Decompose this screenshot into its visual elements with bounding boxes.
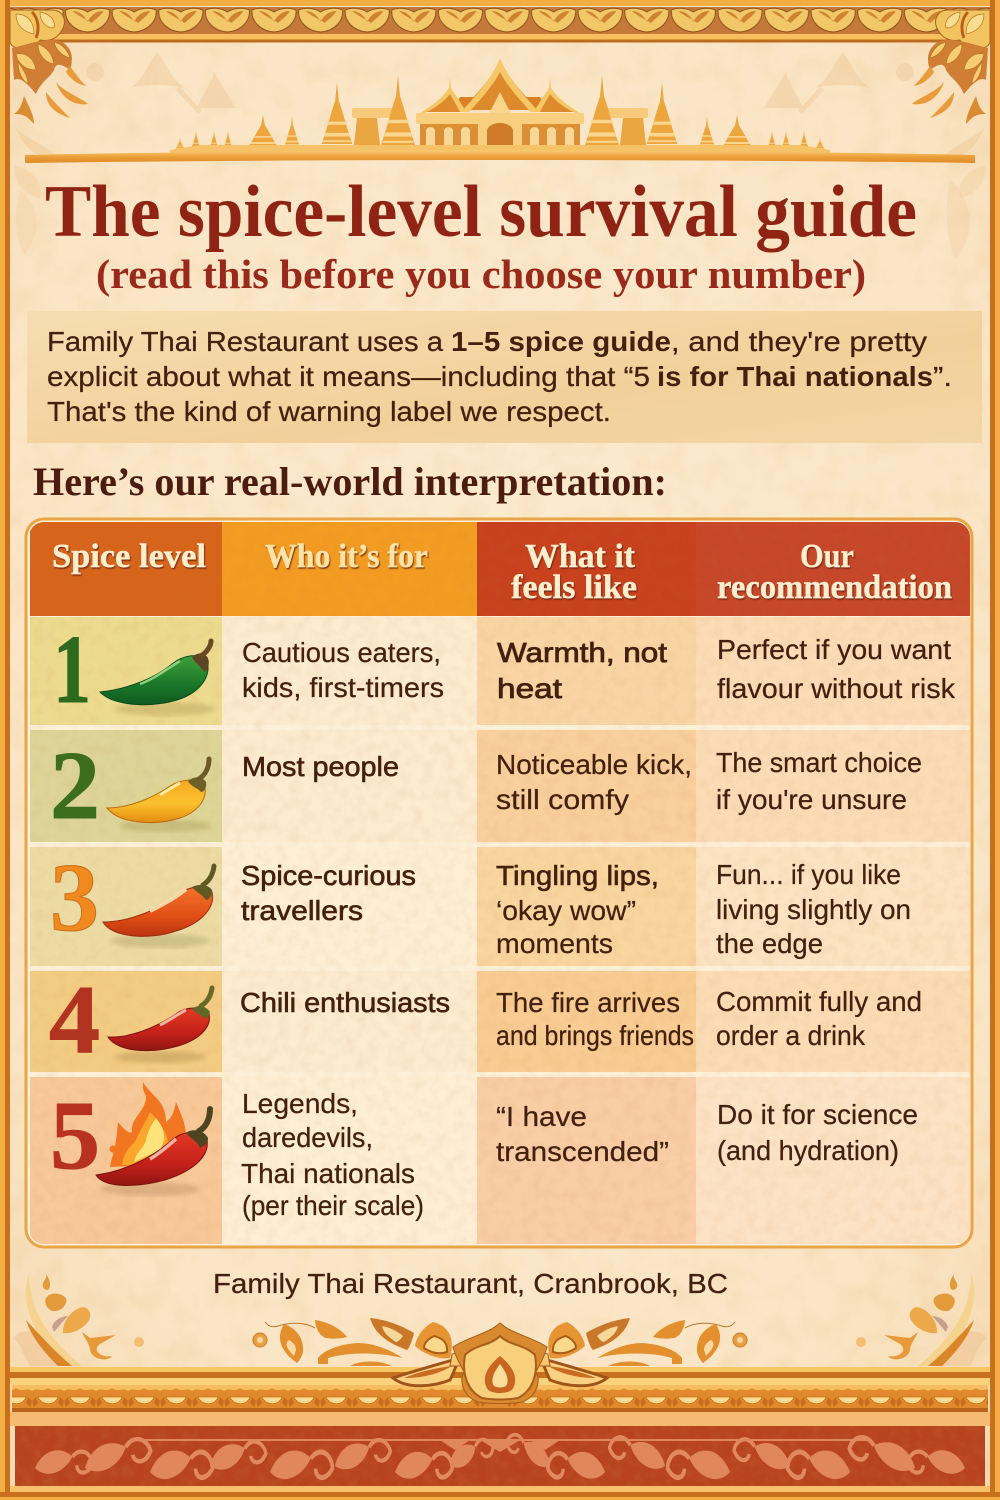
title: The spice-level survival guide xyxy=(45,171,917,253)
recommendation column: order a drink xyxy=(716,1020,866,1051)
ground band xyxy=(170,145,830,154)
intro panel: explicit about what it means—including that “5 xyxy=(47,361,650,392)
table headers: feels like xyxy=(511,569,637,606)
recommendation column: (and hydration) xyxy=(717,1135,899,1166)
what it feels like column xyxy=(496,637,694,1167)
what it feels like column: Noticeable kick, xyxy=(496,749,692,780)
who it's for column: Spice-curious xyxy=(241,860,416,891)
intro panel xyxy=(27,311,982,443)
icon: green chili xyxy=(100,641,215,716)
footer credit: Family Thai Restaurant, Cranbrook, BC xyxy=(213,1268,728,1299)
intro panel: Family Thai Restaurant uses a xyxy=(47,326,443,357)
who it's for column: Most people xyxy=(242,751,399,782)
table headers: What it xyxy=(525,538,636,575)
bottom border bands xyxy=(0,1367,1000,1500)
what it feels like column: heat xyxy=(497,673,562,704)
what it feels like column: Warmth, not xyxy=(497,637,667,668)
icon: orange chili xyxy=(103,866,214,948)
table headers: recommendation xyxy=(717,569,952,606)
intro panel: ”. xyxy=(933,361,952,392)
icon: yellow chili xyxy=(107,759,211,832)
who it's for column: Legends, xyxy=(242,1088,358,1119)
row 2 xyxy=(50,732,211,840)
table headers: Spice level xyxy=(52,538,206,575)
corner ornament: top left xyxy=(10,10,88,198)
spires xyxy=(175,75,825,150)
temple skyline xyxy=(25,58,975,163)
icon: red chili xyxy=(108,988,212,1063)
red band floral pattern xyxy=(35,1430,965,1479)
right flourishes xyxy=(536,1318,747,1386)
row 4: 4 xyxy=(49,966,100,1074)
row 1: 1 xyxy=(53,616,91,724)
recommendation column: Perfect if you want xyxy=(717,634,951,665)
top border frieze xyxy=(0,0,1000,42)
intro panel: 1–5 spice guide xyxy=(451,326,671,357)
what it feels like column: ‘okay wow” xyxy=(496,895,636,926)
intro panel: , and they're pretty xyxy=(671,326,927,357)
recommendation column: the edge xyxy=(716,928,823,959)
row 3 xyxy=(50,844,214,952)
recommendation column: flavour without risk xyxy=(717,673,956,704)
what it feels like column: moments xyxy=(496,928,613,959)
who it's for column: daredevils, xyxy=(242,1122,373,1153)
row 2: 2 xyxy=(50,732,100,840)
what it feels like column: and brings friends xyxy=(496,1020,694,1051)
who it's for column: Cautious eaters, xyxy=(242,637,441,668)
who it's for column: Chili enthusiasts xyxy=(240,987,450,1018)
table xyxy=(26,519,972,1247)
main hall xyxy=(416,58,584,145)
subtitle: (read this before you choose your number) xyxy=(96,251,866,297)
table cell backgrounds xyxy=(30,522,970,1244)
who it's for column: travellers xyxy=(241,895,363,926)
row 1 xyxy=(53,616,215,724)
bottom corner ornament: right xyxy=(856,1272,987,1366)
what it feels like column: Tingling lips, xyxy=(496,860,659,891)
recommendation column: Fun... if you like xyxy=(716,859,901,890)
bottom corner ornament: left xyxy=(13,1272,144,1366)
what it feels like column: “I have xyxy=(496,1101,587,1132)
icon: flaming chili xyxy=(96,1082,210,1196)
lotus ornament xyxy=(253,1318,747,1404)
what it feels like column: transcended” xyxy=(496,1136,669,1167)
row 5: 5 xyxy=(50,1082,100,1190)
intro panel: That's the kind of warning label we respect. xyxy=(47,396,611,427)
section heading: Here’s our real-world interpretation: xyxy=(33,459,667,504)
what it feels like column: The fire arrives xyxy=(496,987,680,1018)
left flourishes xyxy=(253,1318,464,1386)
table headers: Who it’s for xyxy=(265,538,428,575)
recommendation column: living slightly on xyxy=(716,894,911,925)
who it's for column xyxy=(240,637,450,1221)
intro panel: is for Thai nationals xyxy=(657,361,933,392)
corner ornament: top right xyxy=(912,10,990,198)
recommendation column: Commit fully and xyxy=(716,986,922,1017)
table headers xyxy=(52,538,952,606)
table headers: Our xyxy=(800,538,854,575)
lotus flower xyxy=(453,1323,547,1404)
recommendation column xyxy=(716,634,956,1166)
faint background ornaments xyxy=(16,52,969,260)
row 3: 3 xyxy=(50,844,99,952)
who it's for column: kids, first-timers xyxy=(242,672,444,703)
recommendation column: The smart choice xyxy=(716,747,922,778)
who it's for column: Thai nationals xyxy=(241,1158,415,1189)
row 4 xyxy=(49,966,212,1074)
recommendation column: if you're unsure xyxy=(716,784,907,815)
what it feels like column: still comfy xyxy=(496,784,629,815)
recommendation column: Do it for science xyxy=(717,1099,918,1130)
row 5 xyxy=(50,1082,210,1196)
who it's for column: (per their scale) xyxy=(242,1190,424,1221)
